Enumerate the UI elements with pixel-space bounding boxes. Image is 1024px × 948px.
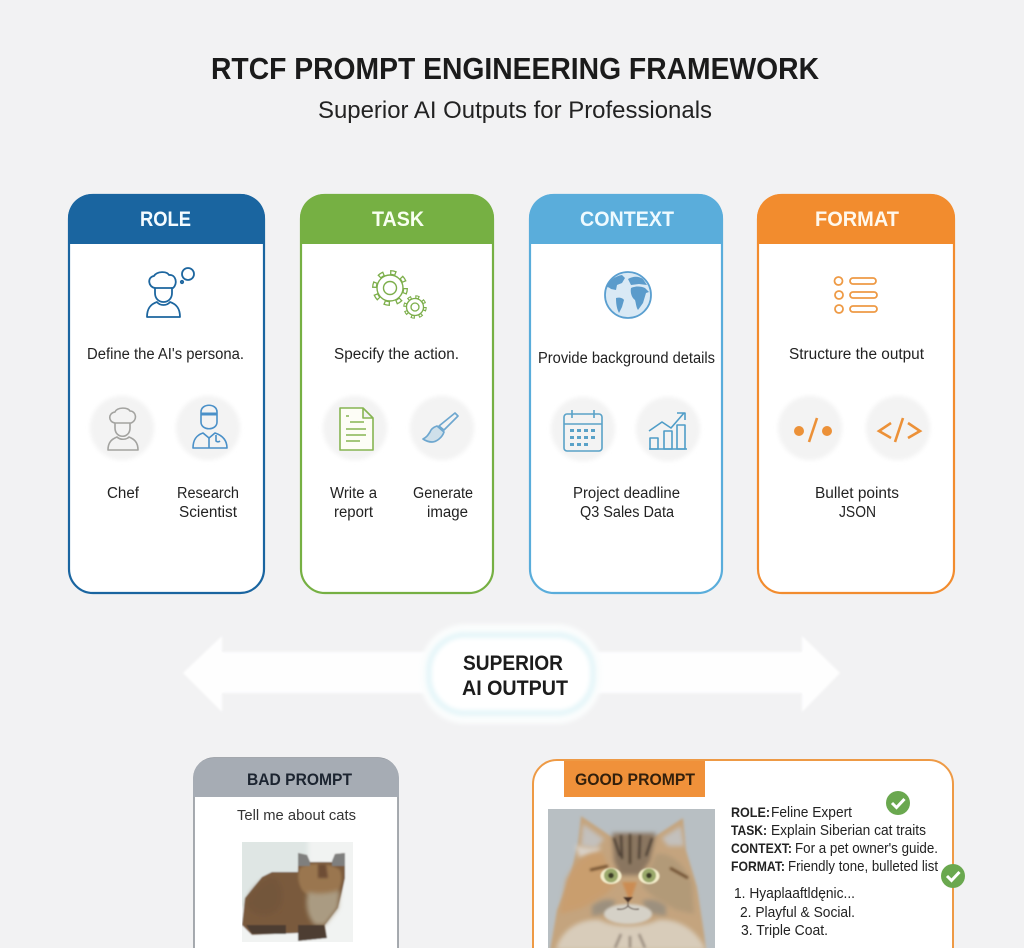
bad prompt text: Tell me about cats <box>237 807 356 824</box>
context header <box>529 194 723 244</box>
context heading: CONTEXT <box>580 208 674 231</box>
icon: check mark right <box>941 864 965 888</box>
fluffy cat image <box>545 806 718 948</box>
bullet points and json label <box>815 485 899 521</box>
bullet points and json label: JSON <box>839 504 876 521</box>
callout: superior ai output: SUPERIOR <box>463 652 563 675</box>
description: Define the AI's persona. <box>87 346 244 363</box>
prompt breakdown text: Feline Expert <box>771 805 852 821</box>
role header <box>68 194 265 244</box>
icon: code brackets circle <box>866 396 930 460</box>
numbered list output: 3. Triple Coat. <box>741 923 828 939</box>
callout: superior ai output: AI OUTPUT <box>462 677 568 700</box>
good prompt heading: GOOD PROMPT <box>575 770 696 789</box>
generate image label <box>413 485 473 521</box>
prompt breakdown text: Explain Siberian cat traits <box>771 823 926 839</box>
bullet points and json label: Bullet points <box>815 485 899 502</box>
bad prompt heading: BAD PROMPT <box>247 770 353 789</box>
numbered list output <box>734 886 855 939</box>
write a report label: report <box>334 504 374 521</box>
icon: brush circle <box>410 396 474 460</box>
panel: format <box>757 194 955 593</box>
numbered list output: 1. Hyaplaaftldęnic... <box>734 886 855 902</box>
icon: list <box>834 277 877 313</box>
icon: calendar circle <box>551 397 615 461</box>
arrow: double-headed output arrow <box>183 636 840 712</box>
icon: chef circle <box>90 396 154 460</box>
bad prompt header <box>193 758 399 797</box>
good prompt tab <box>564 761 705 797</box>
description: Provide background details <box>538 350 715 367</box>
prompt breakdown text: Friendly tone, bulleted list <box>788 859 938 875</box>
icon: growth chart circle <box>636 397 700 461</box>
description: Structure the output <box>789 346 925 363</box>
research scientist label: Research <box>177 485 239 502</box>
icon: check mark top <box>886 791 910 815</box>
task heading: TASK <box>372 208 424 231</box>
icon: report circle <box>323 396 387 460</box>
prompt breakdown text: For a pet owner's guide. <box>795 841 938 857</box>
panel: role <box>68 194 265 593</box>
icon: bullet points circle <box>778 396 842 460</box>
research scientist label <box>177 485 239 521</box>
panel: good prompt <box>533 760 965 948</box>
panel: task <box>300 194 494 593</box>
title: RTCF PROMPT ENGINEERING FRAMEWORK <box>211 51 820 86</box>
write a report label: Write a <box>330 485 377 502</box>
format header <box>757 194 955 244</box>
icon: chef with thought bubble <box>147 268 194 317</box>
role heading: ROLE <box>140 208 191 231</box>
project deadline and q3 sales data label: Q3 Sales Data <box>580 504 674 521</box>
format heading: FORMAT <box>815 208 899 231</box>
generate image label: image <box>427 504 468 521</box>
icon: gears <box>374 272 425 317</box>
prompt breakdown text: TASK: <box>731 822 767 838</box>
research scientist label: Scientist <box>179 504 238 521</box>
prompt breakdown text: ROLE: <box>731 804 770 820</box>
prompt breakdown text <box>731 804 938 875</box>
project deadline and q3 sales data label: Project deadline <box>573 485 680 502</box>
icon: research scientist circle <box>176 396 240 460</box>
icon: globe <box>605 272 651 318</box>
prompt breakdown text: CONTEXT: <box>731 840 792 856</box>
write a report label <box>330 485 377 521</box>
panel: bad prompt <box>193 758 399 948</box>
project deadline and q3 sales data label <box>573 485 680 521</box>
panel: context <box>529 194 723 593</box>
description: Specify the action. <box>334 346 459 363</box>
blurry cat image <box>242 842 353 942</box>
numbered list output: 2. Playful & Social. <box>740 905 855 921</box>
task header <box>300 194 494 244</box>
chef label: Chef <box>107 485 140 502</box>
callout: superior ai output <box>420 624 602 724</box>
generate image label: Generate <box>413 485 473 502</box>
subtitle: Superior AI Outputs for Professionals <box>318 97 712 124</box>
prompt breakdown text: FORMAT: <box>731 858 785 874</box>
